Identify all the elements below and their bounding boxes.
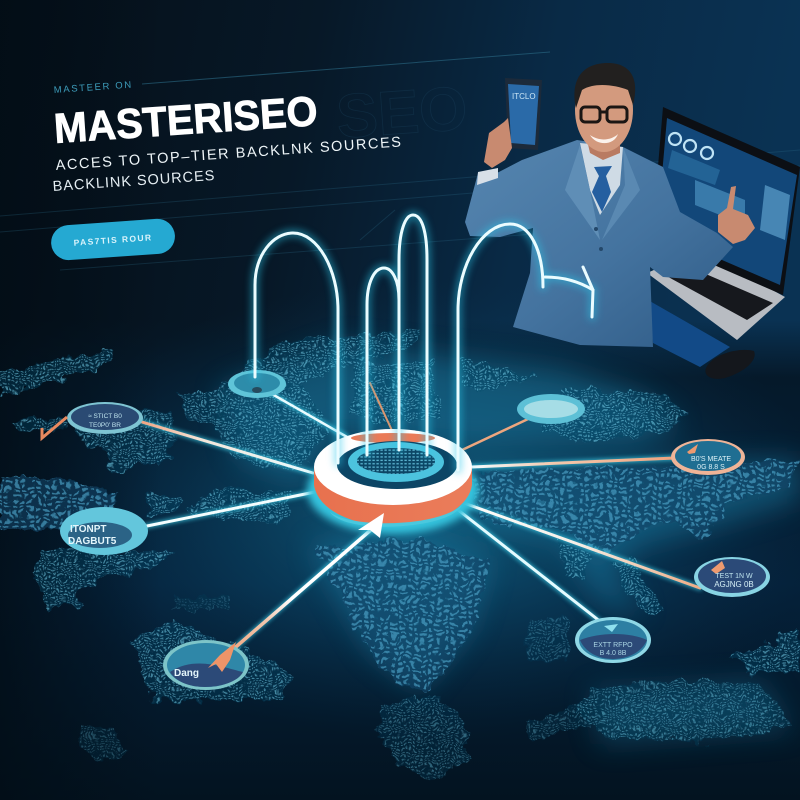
world map data texture [0, 330, 800, 782]
eyebrow text: MASTEER ON [53, 80, 133, 96]
node: upper left label [67, 402, 143, 434]
node: right lower label: TEST 1N W [715, 573, 753, 580]
left hand holding phone: ITCLO [512, 92, 536, 101]
button: PAS7TIS ROUR [73, 232, 153, 248]
arrowhead into hub [358, 513, 384, 538]
node: right lower label [694, 557, 770, 597]
node: left label: DAGBUT5 [68, 536, 117, 547]
subtitle line 2: BACKLINK SOURCES [52, 168, 215, 195]
right hand pointing [718, 186, 755, 244]
orange check arrow [42, 417, 67, 438]
node: upper right [517, 394, 585, 424]
node: lower centre right label: EXTT RFPO [593, 642, 633, 649]
node: left label: ITONPT [70, 524, 106, 535]
body [465, 140, 733, 347]
button [50, 218, 176, 261]
background grid lines [0, 150, 800, 270]
laptop [647, 107, 800, 367]
title: MASTERISEO [52, 87, 319, 152]
cuff [477, 168, 498, 185]
subtitle line 1: ACCES TO TOP–TIER BACKLNK SOURCES [55, 134, 401, 174]
central hub ring [307, 429, 479, 534]
node: right upper label [671, 439, 745, 475]
node: upper left label: ≈ STICT B0 [88, 413, 122, 420]
node: upper left label: TE0P0' BR [89, 422, 121, 429]
connector lines [142, 383, 700, 665]
node: lower left label: Dang [174, 668, 199, 679]
faint watermark SEO: SEO [334, 74, 470, 152]
node: left label [60, 507, 148, 555]
presenter with laptop [465, 63, 800, 367]
glowing arches [255, 215, 593, 470]
node: lower centre right label [575, 617, 651, 663]
node: lower centre right label: B 4.0 8B [600, 650, 627, 657]
eyebrow rule [142, 52, 550, 84]
computer mouse [705, 350, 755, 379]
head [574, 63, 635, 160]
node: right lower label: AGJNG 0B [714, 580, 754, 589]
node: top-left arch [228, 370, 286, 398]
shirt and tie [565, 143, 640, 251]
node: right upper label: B0'S MEATE [691, 456, 731, 463]
left hand holding phone [484, 78, 542, 168]
node: lower left label [163, 640, 249, 690]
node: right upper label: 0G 8.8 S [697, 464, 725, 471]
